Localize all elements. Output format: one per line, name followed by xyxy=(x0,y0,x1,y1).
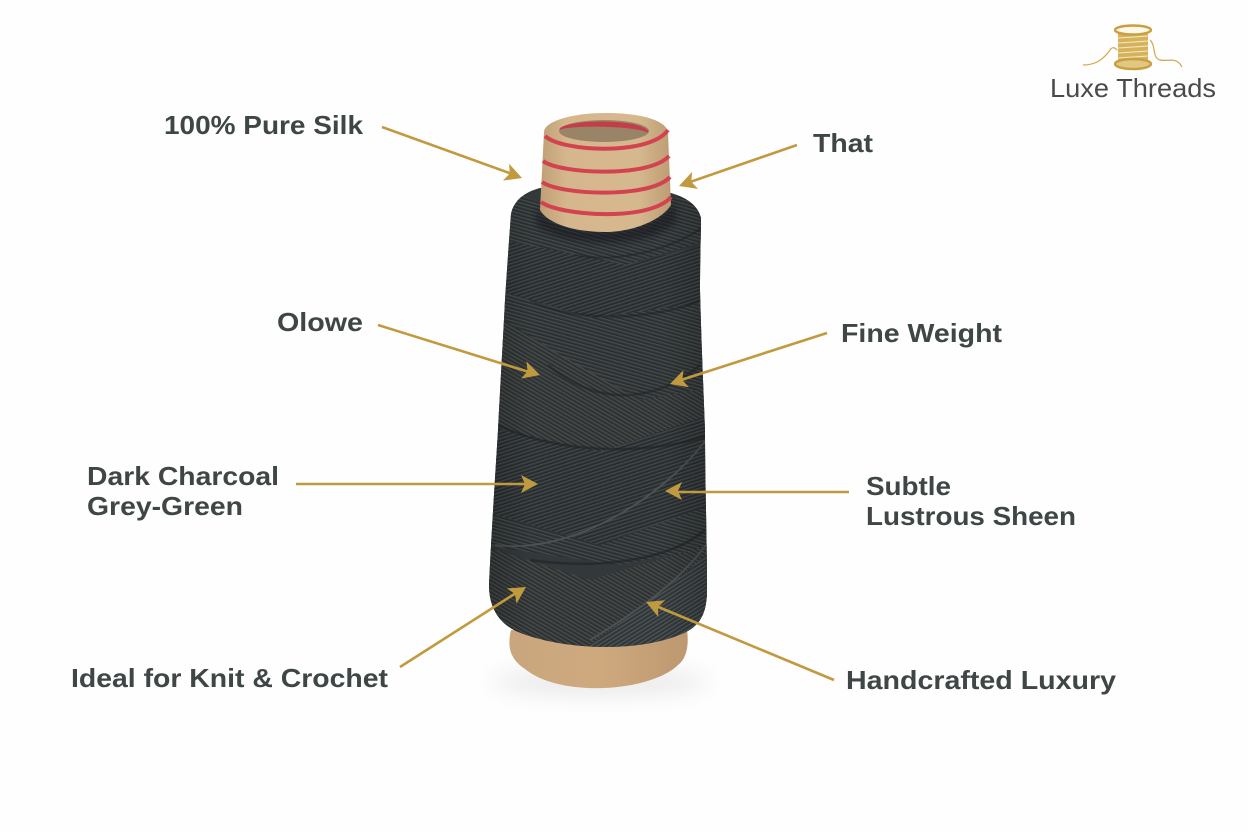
cardboard core xyxy=(540,113,671,232)
red rim of opening xyxy=(560,122,648,132)
cylinder shading xyxy=(489,206,707,628)
label: Dark Charcoal Grey-Green: Grey-Green xyxy=(87,491,243,521)
arrow: Dark Charcoal Grey-Green xyxy=(296,475,538,493)
callout labels xyxy=(71,110,1117,695)
wordmark: Luxe Threads xyxy=(1050,73,1216,103)
icon: gold thread spool xyxy=(1083,26,1182,69)
winding bands xyxy=(489,196,707,647)
label: Fine Weight: Fine Weight xyxy=(841,318,1002,348)
arrow: 100% Pure Silk xyxy=(382,127,525,186)
arrow: Fine Weight xyxy=(667,333,827,393)
arrow: Subtle Lustrous Sheen xyxy=(665,482,849,500)
label: Ideal for Knit & Crochet: Ideal for Knit & Crochet xyxy=(71,663,388,693)
dark seams and wrapping threads xyxy=(495,228,706,640)
arrow: Olowe xyxy=(378,325,543,384)
logo: Luxe Threads xyxy=(1050,26,1216,103)
label: Handcrafted Luxury: Handcrafted Luxury xyxy=(846,665,1117,695)
infographic canvas xyxy=(72,24,1215,698)
label: Subtle Lustrous Sheen: Subtle xyxy=(866,471,951,501)
shadow beneath core xyxy=(536,200,676,242)
label: Dark Charcoal Grey-Green xyxy=(87,461,279,521)
thread body xyxy=(489,188,707,647)
label: Subtle Lustrous Sheen: Lustrous Sheen xyxy=(866,501,1076,531)
label: 100% Pure Silk: 100% Pure Silk xyxy=(164,110,364,140)
callout arrows xyxy=(296,127,849,680)
label: That: That xyxy=(813,128,873,158)
shadow under spool xyxy=(490,670,710,694)
arrow: Ideal for Knit & Crochet xyxy=(400,579,531,667)
label: Subtle Lustrous Sheen xyxy=(866,471,1076,531)
red stripes xyxy=(541,130,671,214)
core opening xyxy=(559,120,649,142)
arrow: Handcrafted Luxury xyxy=(643,594,834,680)
label: Olowe: Olowe xyxy=(277,307,363,337)
base colour xyxy=(489,188,707,647)
core tube xyxy=(540,113,671,232)
cardboard base xyxy=(509,630,688,688)
thread spool illustration xyxy=(489,113,707,698)
label: Dark Charcoal Grey-Green: Dark Charcoal xyxy=(87,461,279,491)
arrow: That xyxy=(676,145,797,194)
